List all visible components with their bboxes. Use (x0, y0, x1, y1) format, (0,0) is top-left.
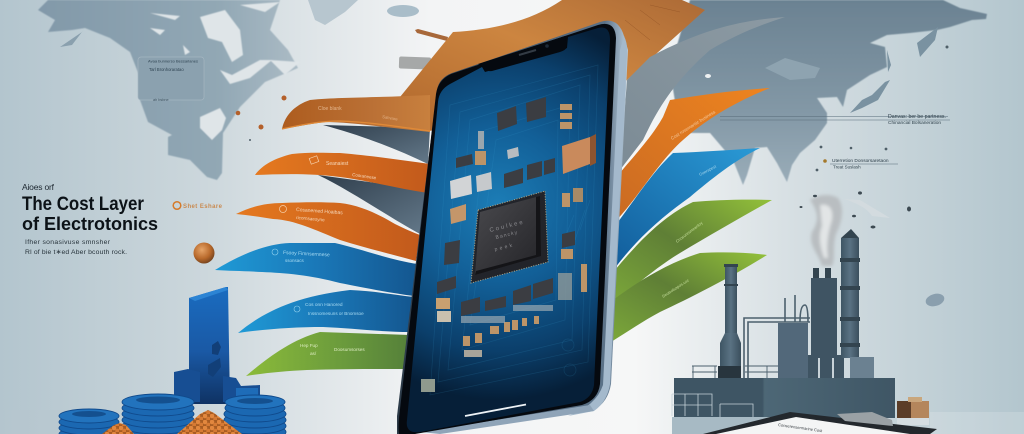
map callout box: ah bsbne (153, 98, 169, 102)
chip: small copper parts (421, 104, 587, 392)
phone screen (407, 28, 610, 432)
right layer: blue: Guerapest (698, 163, 718, 177)
left layer: green: Hep Fup (300, 343, 318, 348)
left layer: green: as/ (310, 351, 317, 356)
tag: share label (173, 202, 223, 210)
map: North America (38, 0, 300, 180)
callout: right lower label: Uterretion Donsorsaretaon (832, 158, 889, 164)
left layer: blue lower: Cos onn Hanored (305, 302, 343, 308)
processor chip: peek (494, 243, 513, 253)
map callout box (138, 57, 204, 102)
right layer: orange: Cost rosemantic business (670, 109, 717, 141)
title block: Aioes orf (22, 182, 55, 192)
title block (22, 182, 158, 256)
map speckles (816, 46, 948, 195)
phone bezel (398, 24, 616, 434)
left layer: slate upper (323, 125, 430, 164)
left layer: blue upper: Fsooy Fimnsernnese (283, 250, 330, 258)
callout: right upper label: Chinancial Bolsaneration (888, 120, 941, 126)
paper flake (844, 199, 890, 218)
pollution specks (800, 192, 911, 228)
left chimney (718, 264, 741, 378)
icon: copper sphere (194, 242, 214, 264)
factory base (674, 378, 895, 418)
coil stack: left (59, 409, 119, 434)
left layer: copper: Cloe blank (318, 106, 342, 112)
pipework and railings (692, 295, 810, 378)
coil stack: right (224, 395, 286, 434)
circuit traces (430, 65, 598, 395)
oval map fleck (924, 292, 946, 308)
clipboard (703, 412, 937, 434)
left layer: orange lower: Cosanemed Hoaibas (296, 207, 343, 216)
cardboard box (897, 397, 929, 425)
map callout box: Tarl Bronhoraratao (149, 67, 184, 72)
central block (808, 268, 844, 378)
chip: dark squares (437, 97, 575, 316)
tank (778, 323, 808, 378)
lakes and bays (150, 2, 300, 140)
right layer: green lower (611, 252, 767, 342)
left layer: slate lower (318, 175, 428, 234)
tag: share label: Shet Eshare (183, 204, 223, 210)
right layer: orange (615, 88, 770, 222)
chip: silver blocks (450, 147, 519, 224)
reflection railings (672, 394, 753, 418)
map: Greenland and islands (308, 0, 419, 25)
copper bead pile: centre (177, 410, 242, 434)
copper bead pile: left (102, 423, 134, 434)
right layer: grey (620, 17, 785, 170)
icon: copper rod and cylinder (399, 29, 448, 70)
left layer: green: Doosumsorses (334, 347, 365, 352)
tall chimney (840, 229, 860, 358)
left layer: orange lower (236, 202, 420, 261)
home indicator (465, 404, 526, 416)
smoke plume (810, 195, 842, 266)
left layer: copper: Sahvare (382, 114, 399, 122)
copper flecks (236, 96, 286, 141)
chip: copper block (562, 134, 596, 174)
left layer: copper (282, 95, 430, 132)
map: Asia (670, 0, 987, 185)
smartphone (397, 21, 628, 434)
callout: right upper label: Danvas: ber be partness. (888, 114, 946, 120)
left layer: blue lower (238, 290, 414, 333)
left layer: green (246, 332, 410, 376)
map callout box: Avaa bunnerso Bessarianes (148, 58, 198, 64)
right layer: green upper (613, 200, 772, 305)
coil stack: centre (122, 394, 194, 434)
title block: The Cost Layer (22, 193, 144, 215)
notch (478, 36, 567, 71)
callout: right upper label (720, 114, 950, 126)
right layer: blue (615, 148, 760, 268)
callout: right lower label: Treat Suslash (833, 164, 861, 170)
left layer: blue lower: Inssnomesuns or Bnomsoe (308, 311, 364, 316)
processor chip: Bancky (495, 230, 518, 241)
left layer: orange lower: ricornsaesyne (296, 215, 325, 223)
title block: Ifher sonasivuse smnsher (25, 239, 111, 246)
left layer: orange upper: Cosraneese (352, 172, 377, 180)
factory (672, 195, 895, 434)
processor chip: Coulkee (489, 220, 524, 234)
phone frame (397, 21, 628, 434)
title block: Rl of bie t∗ed Aber bcouth rock. (25, 249, 127, 256)
left layer: blue upper (215, 243, 418, 296)
callout: right lower label (823, 158, 898, 170)
right layer: green lower: Seutsolsapos.coc (661, 278, 690, 299)
title block: of Electrotonics (22, 214, 158, 234)
top copper sheet (400, 0, 705, 132)
clipboard: Conserensermarine Cost (778, 422, 823, 433)
left layer: orange upper (255, 153, 430, 193)
left layer: blue upper: ssonsacs (285, 258, 305, 263)
side block (850, 357, 874, 378)
processor chip (471, 191, 548, 283)
right layer: green upper: Cnosuresmeantoy (675, 220, 704, 244)
left layer: orange upper: Seanaiest (326, 161, 349, 167)
blue bar tower (174, 287, 260, 404)
